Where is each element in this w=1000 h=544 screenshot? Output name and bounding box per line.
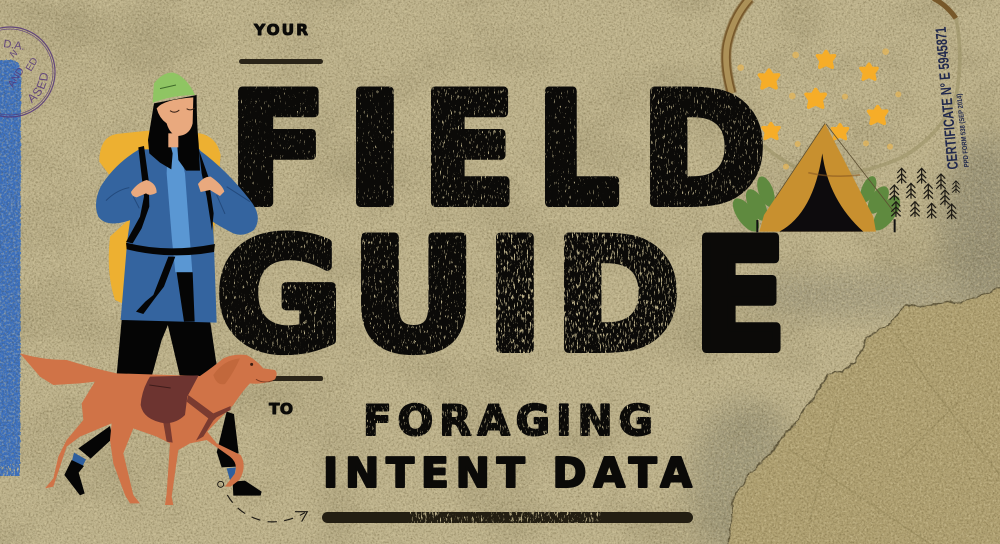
smiling eyes: [170, 108, 195, 112]
subtitle: FORAGING: FORAGING: [363, 396, 653, 445]
leash ring: [218, 481, 224, 487]
hands: [131, 177, 224, 197]
lower strap: [163, 423, 173, 443]
hat crease: [160, 85, 176, 89]
heading: TO: TO: [269, 400, 293, 418]
stamp text: n: N: [8, 48, 19, 60]
coat creases: [106, 187, 250, 214]
postmark stamp: [0, 26, 56, 118]
blue torn strip: [0, 60, 21, 476]
face: [157, 97, 193, 136]
bag pocket line: [149, 385, 171, 388]
stamp text: ased: ASED: [28, 73, 48, 104]
title: GUIDE: U: [352, 208, 476, 386]
coat: [96, 148, 258, 323]
hiker illustration: [64, 73, 262, 496]
title: GUIDE: [216, 207, 787, 386]
pine trees: [890, 168, 960, 219]
harness: [187, 395, 231, 441]
rule near dog: [270, 376, 323, 381]
title: FIELD: E: [422, 62, 516, 239]
rule under YOUR: [239, 59, 323, 64]
coffee ring stain: [726, 0, 960, 175]
title: GUIDE: I: [486, 208, 543, 386]
heading: YOUR: YOUR: [253, 21, 308, 39]
dog eye and mouth: [250, 363, 273, 382]
saddle bag: [141, 375, 199, 423]
leaves left: [728, 174, 778, 236]
title: FIELD: [229, 61, 766, 240]
dog body: [20, 353, 277, 505]
title: FIELD: L: [537, 62, 619, 239]
title: GUIDE: E: [694, 208, 787, 385]
hat: [153, 73, 195, 103]
dashed arrow: [227, 495, 307, 522]
pants centre: [177, 272, 195, 322]
certificate stamp text: [933, 26, 971, 170]
campsite illustration: [728, 48, 960, 236]
backpack: [99, 131, 221, 304]
leaves right: [857, 174, 905, 235]
shirt: [167, 145, 192, 272]
dog illustration: [20, 353, 307, 522]
hiker legs: [64, 320, 262, 496]
neck: [168, 133, 178, 147]
stamp text: initials: D.A.: [3, 38, 25, 53]
hiker body: [96, 73, 258, 323]
bottom bar: [322, 512, 693, 523]
title: FIELD: F: [229, 61, 326, 239]
hair: [148, 95, 200, 171]
straps and belt: [126, 146, 215, 314]
tent: [757, 123, 895, 232]
stars: [737, 48, 901, 170]
title: GUIDE: D: [555, 207, 680, 385]
torn paper corner: [728, 286, 1000, 544]
subtitle: INTENT DATA: INTENT DATA: [323, 449, 692, 497]
title: FIELD: D: [641, 61, 766, 239]
dog ear: [213, 358, 240, 384]
stamp text: ed: ED: [24, 56, 41, 74]
stamp text: and: AND: [6, 66, 27, 90]
title: GUIDE: G: [216, 207, 343, 385]
certificate stamp text: PPD FORM 538 (SEP 2014): [956, 93, 971, 168]
title: FIELD: I: [346, 62, 403, 240]
